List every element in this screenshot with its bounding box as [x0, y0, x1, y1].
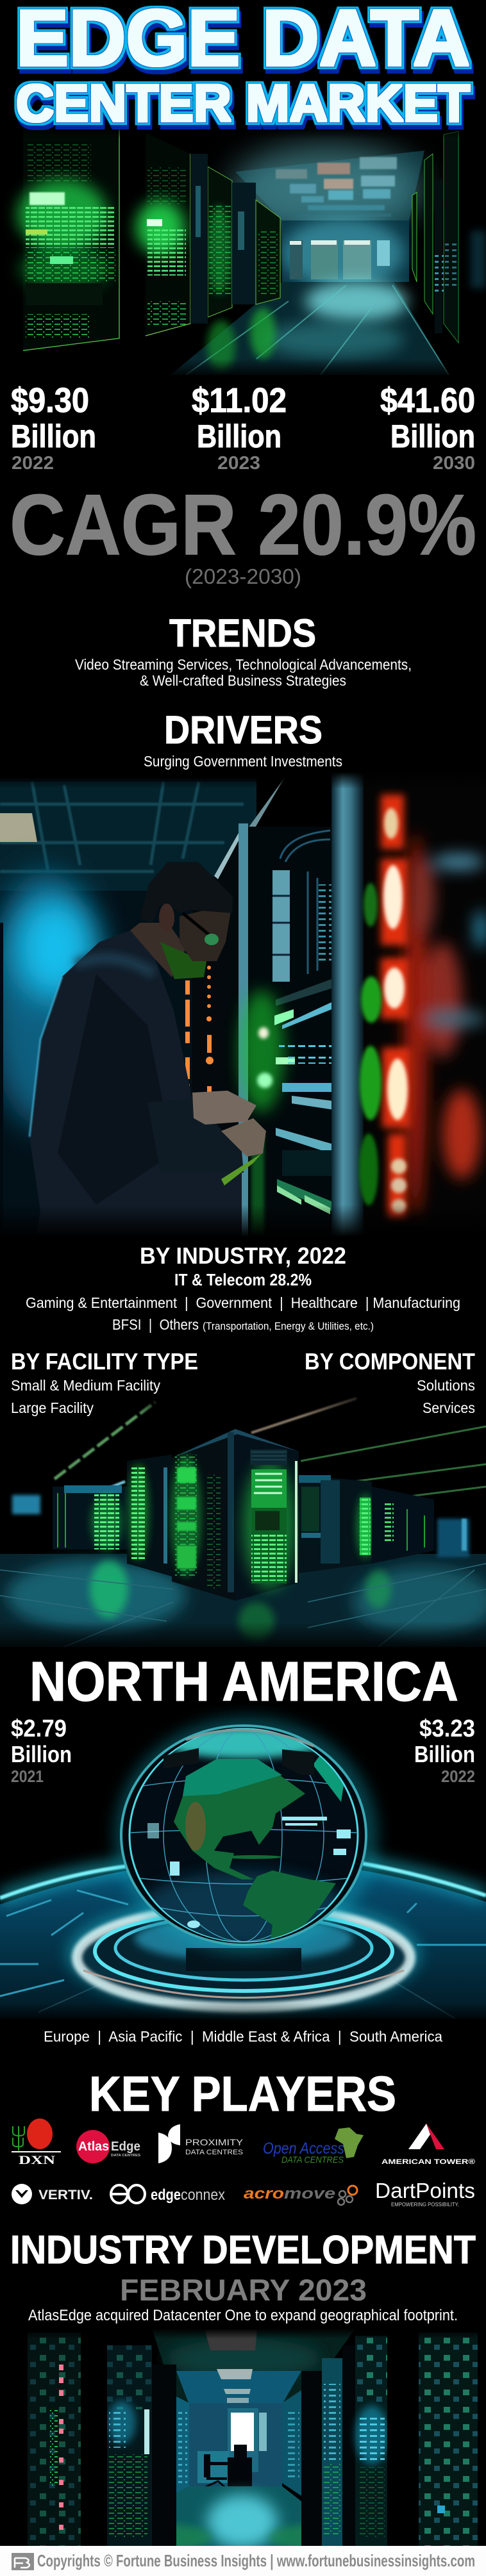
regional stat: 2022: 2022 [441, 1767, 475, 1786]
globe [115, 1717, 378, 1954]
foreground pillar [331, 772, 364, 1237]
logo: AtlasEdge: DATA CENTRES [111, 2154, 141, 2158]
logo: Proximity Data Centres: DATA CENTRES [185, 2149, 243, 2156]
engineer figure [29, 862, 266, 1237]
corridor ceiling [152, 2329, 355, 2404]
logo: Open Access Data Centres [263, 2127, 364, 2165]
logo: Open Access Data Centres: DATA CENTRES [281, 2154, 344, 2165]
logo: DXN [12, 2118, 61, 2167]
logo: American Tower [381, 2124, 475, 2166]
stat: 2030 market size [380, 381, 475, 474]
server rack door and interior [192, 777, 343, 1237]
rack 3 and 4 [190, 154, 280, 324]
logo: Acromove [244, 2185, 357, 2205]
south america [243, 1870, 336, 1944]
logo: American Tower: AMERICAN TOWER® [381, 2158, 475, 2166]
logo: EdgeConneX: connex [181, 2186, 225, 2204]
segment: by facility type [11, 1348, 198, 1416]
heading: key players: KEY PLAYERS [89, 2067, 396, 2122]
drivers: Surging Government Investments [144, 753, 342, 770]
regional stat: 2021: 2021 [11, 1767, 44, 1786]
stat: 2023 market size: 2023 [217, 453, 260, 474]
floor reflections [171, 281, 449, 375]
regional stat: 2021: $2.79 [11, 1715, 67, 1742]
greenland [313, 1746, 346, 1802]
logo: Vertiv: VERTIV. [38, 2188, 93, 2202]
image: data center corridor [0, 125, 486, 378]
trends: & Well-crafted Business Strategies [140, 672, 346, 689]
room background [0, 779, 256, 1237]
logo: EdgeConneX: edge [151, 2186, 181, 2204]
segment: by facility type: BY FACILITY TYPE [11, 1348, 198, 1375]
stat: 2030 market size: Billion [390, 418, 475, 454]
back wall with lit racks [282, 218, 409, 288]
stat: 2023 market size: Billion [197, 418, 281, 454]
stat: 2022 market size: $9.30 [11, 381, 89, 420]
regional stat: 2022: $3.23 [419, 1715, 475, 1742]
segment: by industry: (Transportation, Energy & Utilities, etc.) [203, 1320, 374, 1332]
logo: Acromove: acro [244, 2185, 284, 2202]
regional stat: 2022 [414, 1715, 475, 1786]
stat: 2030 market size: 2030 [433, 453, 475, 474]
drivers [144, 708, 342, 770]
stat: 2022 market size: Billion [11, 418, 96, 454]
segment: by industry [26, 1243, 460, 1333]
stat: 2023 market size [192, 381, 287, 474]
floor [0, 1554, 486, 1647]
right racks [412, 131, 486, 343]
north america [174, 1759, 305, 1879]
logo: AtlasEdge [76, 2130, 141, 2163]
logo: Acromove: move [284, 2185, 335, 2202]
logo: Proximity Data Centres [158, 2124, 244, 2163]
logo: AtlasEdge: Edge [111, 2140, 140, 2154]
regional stat: 2021 [11, 1715, 72, 1786]
regional stat: 2021: Billion [11, 1741, 72, 1767]
left rack columns [28, 2332, 152, 2546]
image: server corridor with office [0, 2329, 486, 2550]
stat: 2023 market size: $11.02 [192, 381, 287, 420]
rack 1 [17, 128, 119, 351]
logo: DXN: DXN [19, 2154, 55, 2167]
ceiling lines [54, 1398, 486, 1503]
footer band [0, 2546, 486, 2576]
segment: by industry: BY INDUSTRY, 2022 [140, 1243, 346, 1269]
left rack [127, 1455, 172, 1576]
back wall and window [189, 2403, 282, 2486]
other regions: Europe | Asia Pacific | Middle East & Africa | South America [44, 2028, 442, 2045]
rack 2 [136, 133, 190, 336]
logo: DartPoints: DartPoints [375, 2179, 475, 2202]
stat: 2022 market size: 2022 [12, 453, 54, 474]
segment: by component [305, 1348, 475, 1416]
segment: by industry: IT & Telecom 28.2% [174, 1270, 312, 1289]
segment: by facility type: Small & Medium Facility [11, 1377, 160, 1394]
trends [75, 611, 412, 689]
trends: Video Streaming Services, Technological Advancements, [75, 656, 412, 673]
regional stat: 2022: Billion [414, 1741, 475, 1767]
segment: by industry: BFSI | Others [112, 1316, 199, 1333]
horizon arc and ground [0, 1858, 486, 2019]
segment: by component: Services [423, 1399, 475, 1416]
green glow [239, 990, 284, 1112]
footer logo [12, 2553, 34, 2570]
segment: by industry: Gaming & Entertainment | Government | Healthcare | Manufacturing [26, 1294, 460, 1311]
CAGR figure: (2023-2030) [185, 565, 301, 588]
right rack columns [81, 2332, 478, 2546]
floor [122, 2486, 359, 2550]
logo: Open Access Data Centres: Open Access [263, 2140, 344, 2158]
image: server hall with green racks [0, 1391, 486, 1653]
logo: Vertiv [12, 2184, 93, 2204]
logo: DartPoints: EMPOWERING POSSIBILITY. [391, 2202, 459, 2208]
logo: Proximity Data Centres: PROXIMITY [185, 2137, 244, 2147]
stat: 2030 market size: $41.60 [380, 381, 475, 420]
platform [67, 1897, 420, 2012]
image: engineer at server rack [0, 772, 486, 1237]
image: holographic globe on platform [0, 1717, 486, 2025]
segment: by component: Solutions [417, 1377, 475, 1394]
title: CENTER MARKET [16, 74, 470, 133]
trends: TRENDS [169, 611, 316, 655]
ceiling [231, 144, 424, 234]
far left blue racks [12, 1485, 127, 1550]
stat: 2022 market size [11, 381, 96, 474]
desk and chair [200, 2445, 252, 2497]
drivers: DRIVERS [164, 708, 323, 752]
logo: AtlasEdge: Atlas [78, 2140, 109, 2154]
central rack [171, 1429, 299, 1601]
segment: by facility type: Large Facility [11, 1399, 94, 1416]
near corridor racks [152, 2345, 355, 2546]
development date: FEBRUARY 2023 [120, 2273, 367, 2307]
title [16, 0, 470, 133]
blurred red and green lights [359, 772, 486, 1237]
logo: EdgeConneX [111, 2185, 225, 2204]
right racks [299, 1475, 469, 1573]
orange LEDs [185, 966, 214, 1092]
